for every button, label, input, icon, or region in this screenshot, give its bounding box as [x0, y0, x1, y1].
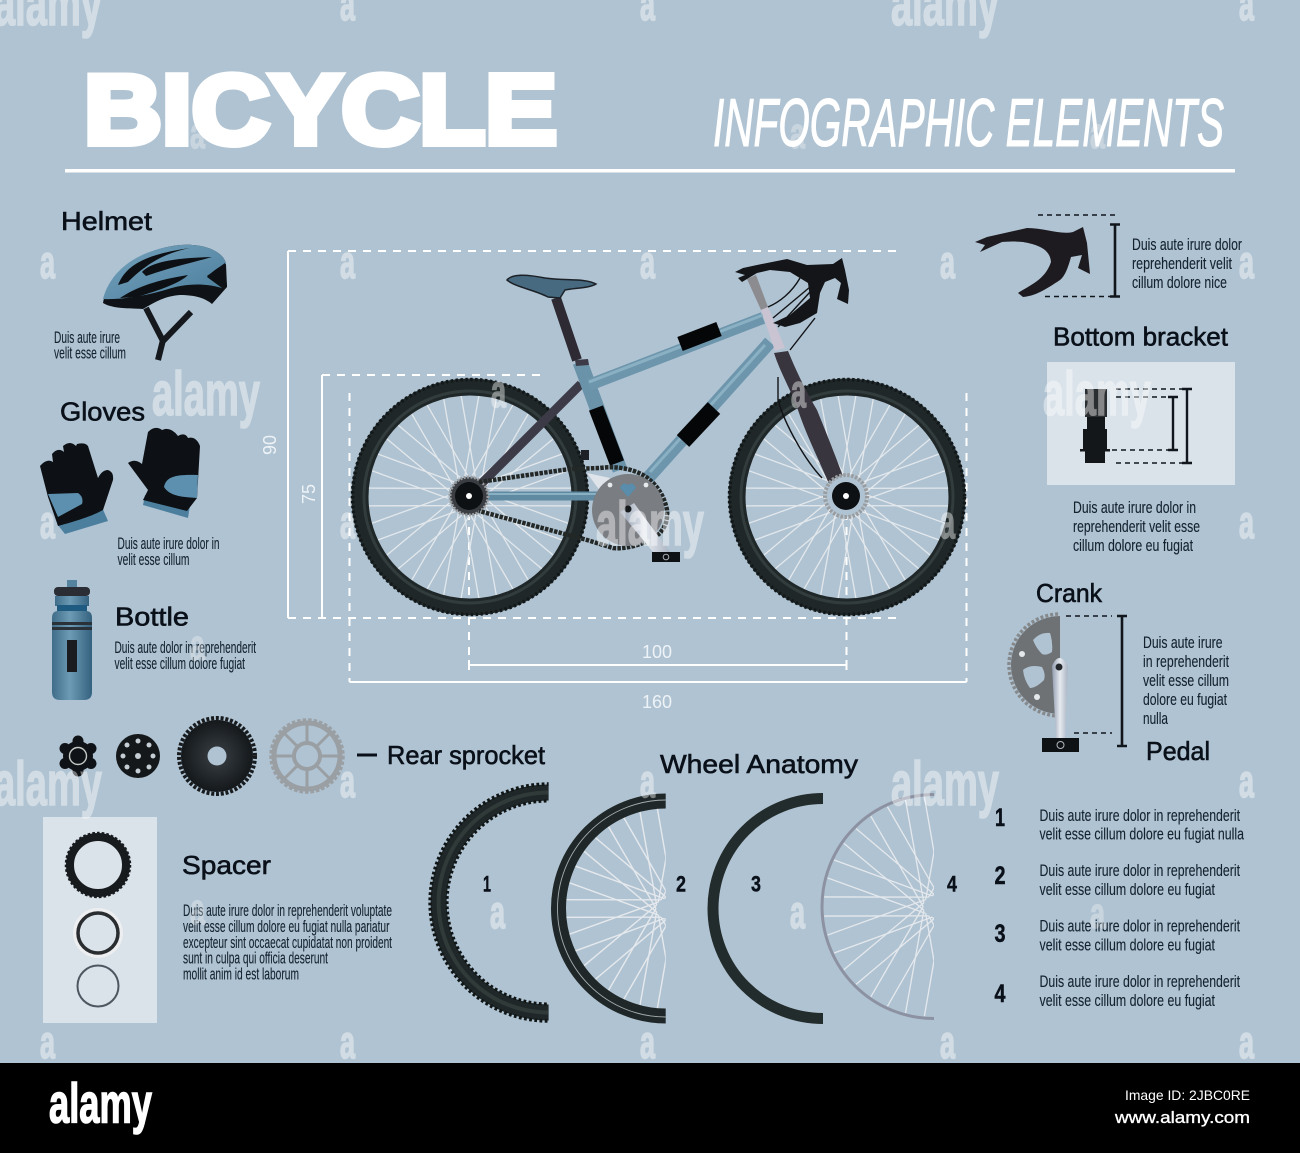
- stock watermark overlay: a: [340, 1016, 355, 1068]
- note 3: 3: [994, 920, 1006, 948]
- dimension: bracket: [1112, 389, 1192, 463]
- heading: helmet: Helmet: [61, 206, 153, 236]
- stock watermark overlay: a: [491, 365, 506, 417]
- stock watermark overlay: a: [640, 1016, 655, 1068]
- stock watermark overlay: a: [490, 886, 505, 938]
- text: gloves note: velit esse cillum: [118, 551, 190, 569]
- stock watermark overlay: alamy: [596, 490, 704, 559]
- seat saddle: [507, 275, 596, 298]
- footer band: www.alamy.com: [1114, 1108, 1250, 1127]
- text: helmet note: velit esse cillum: [54, 344, 126, 362]
- panel: crank: [1009, 578, 1229, 766]
- text: spacer note: Duis aute irure dolor in reprehenderit voluptate: [183, 902, 392, 920]
- text: handlebar note: [1132, 236, 1242, 292]
- panel: numbered wheel notes: [994, 804, 1245, 1010]
- text: bottle note: [114, 639, 256, 673]
- label: dimension 90: 90: [260, 435, 280, 455]
- text: spacer note: mollit anim id est laborum: [183, 966, 299, 984]
- spacer card: [43, 817, 157, 1023]
- stock watermark overlay: a: [790, 109, 805, 158]
- text: bracket note: Duis aute irure dolor in: [1073, 499, 1196, 517]
- note 3: [994, 918, 1240, 954]
- icon: pedal: [1042, 738, 1079, 752]
- text: gloves note: Duis aute irure dolor in: [118, 535, 220, 553]
- heading: gloves: Gloves: [60, 396, 145, 426]
- stock watermark overlay: a: [940, 496, 955, 548]
- part 1: tyre: [428, 782, 549, 1023]
- heading: wheel anatomy: Wheel Anatomy: [660, 749, 858, 779]
- bicycle illustration: [333, 258, 984, 633]
- icon: crank arm: [1052, 658, 1068, 738]
- stock watermark overlay: a: [940, 236, 955, 288]
- stock watermark overlay: a: [640, 236, 655, 288]
- handlebar: [735, 258, 849, 327]
- label: 1: 1: [483, 872, 491, 896]
- icon: silver sprocket: [271, 720, 343, 792]
- note 2: velit esse cillum dolore eu fugiat: [1040, 881, 1215, 899]
- text: bracket note: reprehenderit velit esse: [1073, 518, 1200, 536]
- stock watermark overlay: a: [190, 621, 205, 670]
- label: dimension 100: 100: [642, 642, 672, 662]
- stock watermark overlay: a: [340, 236, 355, 288]
- stock watermark overlay: a: [791, 365, 806, 417]
- part 3: inner tube: [708, 793, 823, 1024]
- icon: helmet: [103, 245, 227, 360]
- stock watermark overlay: a: [190, 885, 205, 934]
- label: 4: 4: [947, 872, 958, 896]
- crank arm: [620, 503, 670, 558]
- note 3: velit esse cillum dolore eu fugiat: [1040, 936, 1215, 954]
- dash: [357, 754, 377, 756]
- part 2: wheel with spokes: [551, 794, 666, 1024]
- panel: helmet: [54, 206, 227, 362]
- text: bottle note: Duis aute dolor in reprehenderit: [114, 639, 256, 657]
- stock watermark overlay: a: [340, 496, 355, 548]
- pedal: [652, 552, 680, 562]
- stock watermark overlay: a: [190, 109, 205, 158]
- crank spider: [587, 473, 610, 495]
- stock watermark overlay: alamy: [891, 750, 999, 819]
- stock watermark overlay: alamy: [152, 360, 260, 429]
- icon: spacer disc: [116, 734, 160, 778]
- stock watermark overlay: a: [1090, 889, 1105, 938]
- title: BICYCLE: [84, 54, 557, 164]
- footer band: Image ID: 2JBC0RE: [1125, 1087, 1250, 1103]
- icon: black sprocket: [179, 718, 255, 794]
- panel: sprockets: [60, 718, 546, 794]
- stock watermark overlay: a: [1239, 236, 1254, 288]
- head tube: [747, 275, 785, 351]
- text: handlebar note: cillum dolore nice: [1132, 274, 1227, 292]
- text: handlebar note: reprehenderit velit: [1132, 255, 1232, 273]
- text: crank note: dolore eu fugiat: [1143, 691, 1227, 709]
- icon: bottle: [52, 580, 92, 700]
- rear cassette: [450, 477, 488, 515]
- icon: bearing ring: [76, 911, 120, 955]
- label: 2: 2: [676, 872, 686, 896]
- stock watermark overlay: alamy: [1043, 360, 1151, 429]
- note 4: velit esse cillum dolore eu fugiat: [1040, 992, 1215, 1010]
- stock watermark overlay: a: [1239, 496, 1254, 548]
- dimension: crank: [1066, 616, 1127, 746]
- stock watermark overlay: a: [40, 496, 55, 548]
- note 2: 2: [994, 862, 1006, 890]
- bracket card: [1047, 362, 1235, 485]
- text: helmet note: [54, 329, 126, 362]
- stock watermark overlay: a: [40, 236, 55, 288]
- footer band: [0, 1063, 1300, 1153]
- stock watermark overlay: a: [1090, 109, 1105, 158]
- icon: thin ring: [78, 966, 118, 1006]
- panel: wheel anatomy: [428, 742, 1058, 1024]
- text: crank note: velit esse cillum: [1143, 672, 1229, 690]
- stock watermark overlay: a: [40, 1016, 55, 1068]
- text: bottle note: velit esse cillum dolore fugiat: [114, 655, 245, 673]
- chainring: [592, 474, 664, 546]
- note 2: [994, 862, 1240, 899]
- stock watermark overlay: a: [340, 755, 355, 807]
- bottle cage bolt: [581, 450, 589, 460]
- panel: bottom bracket: [1047, 322, 1235, 555]
- text: crank note: in reprehenderit: [1143, 653, 1229, 671]
- text: bracket note: cillum dolore eu fugiat: [1073, 537, 1193, 555]
- text: gloves note: [118, 535, 220, 569]
- dimension lines: [288, 251, 966, 682]
- note 1: [995, 804, 1245, 844]
- panel: bottle: [52, 580, 256, 700]
- heading: crank: Crank: [1036, 578, 1103, 608]
- note 1: 1: [995, 804, 1005, 832]
- panel: spacer: [43, 817, 392, 1023]
- header rule: [65, 169, 1235, 172]
- label: 3: 3: [751, 872, 761, 896]
- text: handlebar note: Duis aute irure dolor: [1132, 236, 1242, 254]
- stock watermark overlay: a: [640, 755, 655, 807]
- icon: right glove: [128, 428, 200, 518]
- stock watermark overlay: a: [1239, 1016, 1254, 1068]
- label: dimension 160: 160: [642, 692, 672, 712]
- text: spacer note: sunt in culpa qui officia deserunt: [183, 950, 328, 968]
- brake cables: [768, 278, 822, 478]
- text: spacer note: [183, 902, 392, 984]
- text: spacer note: excepteur sint occaecat cupidatat non proident: [183, 934, 392, 952]
- front disc: [825, 475, 867, 517]
- heading: spacer: Spacer: [182, 850, 271, 880]
- fork: [774, 351, 848, 496]
- stock watermark overlay: a: [940, 1016, 955, 1068]
- heading: pedal: Pedal: [1146, 736, 1210, 766]
- text: crank note: [1143, 634, 1229, 728]
- frame: [474, 298, 770, 496]
- front wheel: [710, 361, 984, 633]
- label: dimension 75: 75: [299, 484, 319, 504]
- text: crank note: nulla: [1143, 710, 1169, 728]
- note 4: 4: [994, 980, 1006, 1008]
- footer band: alamy: [49, 1072, 152, 1134]
- stock watermark overlay: a: [790, 886, 805, 938]
- icon: lockring: [60, 736, 96, 776]
- panel: gloves: [40, 396, 220, 569]
- part 4: rim and spokes: [820, 793, 934, 1020]
- heading: rear sprocket: Rear sprocket: [387, 740, 546, 770]
- stock watermark overlay: a: [1239, 755, 1254, 807]
- dimension: handlebar: [1038, 215, 1120, 297]
- heading: bottle: Bottle: [115, 602, 189, 632]
- note 4: [994, 973, 1240, 1010]
- text: helmet note: Duis aute irure: [54, 329, 120, 347]
- text: spacer note: velit esse cillum dolore eu fugiat nulla pariatur: [183, 918, 390, 936]
- rear wheel: [333, 361, 607, 633]
- icon: bracket: [1080, 389, 1110, 463]
- icon: left glove: [40, 443, 113, 534]
- text: bracket note: [1073, 499, 1200, 555]
- heading: bottom bracket: Bottom bracket: [1053, 322, 1229, 352]
- icon: handlebar: [975, 227, 1090, 297]
- panel: handlebar: [975, 215, 1242, 297]
- text: crank note: Duis aute irure: [1143, 634, 1222, 652]
- icon: toothed ring: [66, 834, 130, 896]
- chain: [479, 467, 667, 548]
- icon: half chainring: [1007, 612, 1060, 718]
